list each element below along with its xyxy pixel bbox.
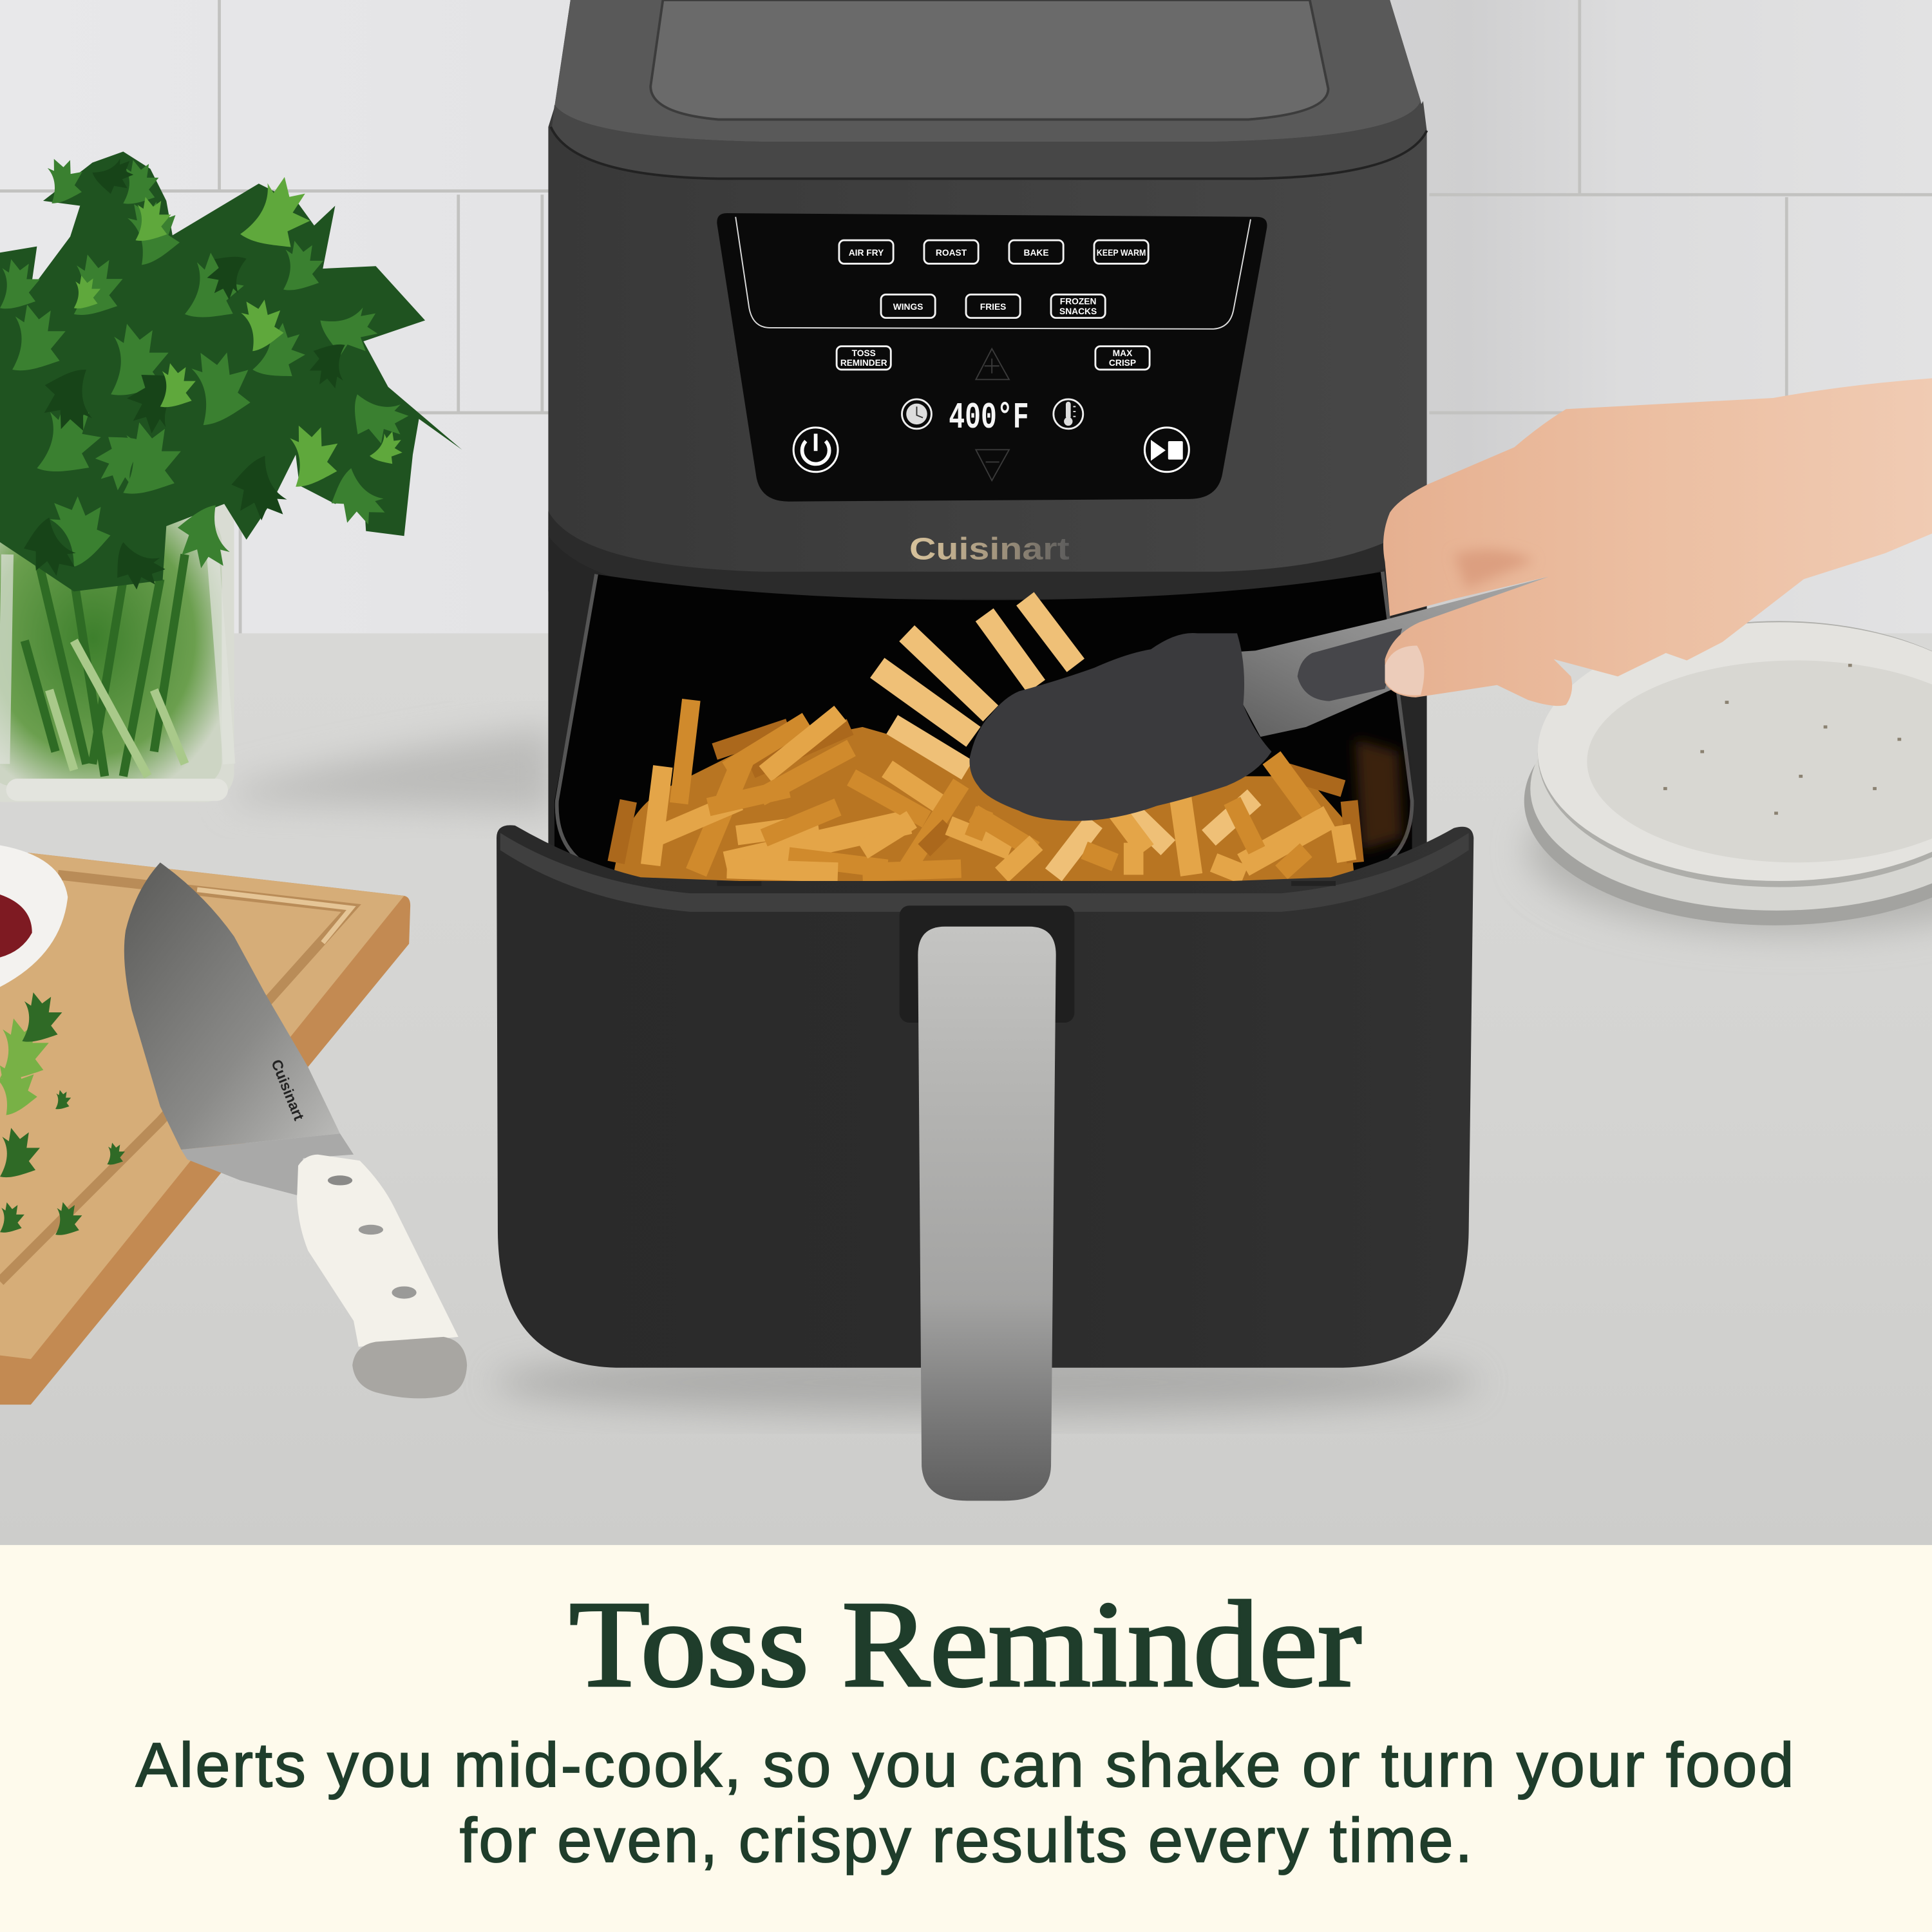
button: wings — [881, 294, 935, 318]
button: fries: FRIES — [980, 302, 1006, 312]
chopped herbs — [0, 992, 125, 1235]
button: bake: BAKE — [1024, 248, 1049, 258]
button: frozen snacks: SNACKS — [1059, 307, 1097, 316]
tongs — [970, 576, 1549, 821]
icon: clock — [902, 399, 931, 429]
bottom caption panel — [0, 1545, 1932, 1932]
wall tiles — [0, 0, 1932, 641]
title: Toss Reminder — [569, 1577, 1361, 1712]
knife logo: Cuisinart — [268, 1057, 308, 1123]
cutting board — [0, 853, 410, 1405]
description line 1: Alerts you mid-cook, so you can shake or turn your food — [135, 1730, 1794, 1800]
button: keep warm — [1094, 240, 1148, 263]
button: toss reminder: TOSS — [852, 348, 876, 358]
chef's knife — [124, 862, 467, 1398]
button: keep warm: KEEP WARM — [1097, 248, 1146, 258]
curled finger shadow — [1454, 549, 1534, 589]
silver drawer handle — [918, 927, 1056, 1501]
lid band — [552, 101, 1427, 178]
lid surround — [554, 0, 1421, 142]
button: frozen snacks — [1051, 294, 1105, 318]
fryer collar and basket opening — [548, 511, 1427, 887]
button: roast — [924, 240, 978, 263]
lid panel — [650, 0, 1328, 120]
sauce bowl — [0, 845, 68, 987]
button: toss reminder — [837, 346, 891, 370]
button: max crisp: MAX — [1113, 348, 1133, 358]
brand logo: Cuisinart — [909, 533, 1070, 567]
temperature up arrow — [976, 348, 1009, 379]
button: bake — [1009, 240, 1063, 263]
temperature down arrow — [976, 450, 1009, 480]
drawer front — [497, 825, 1473, 1368]
fingernail — [1385, 646, 1425, 696]
icon: power — [793, 428, 838, 472]
tong grip — [1298, 629, 1402, 701]
icon: thermometer — [1054, 399, 1083, 429]
tong arm — [1237, 576, 1549, 737]
hand — [1383, 378, 1932, 706]
tong head — [970, 633, 1271, 821]
button: air fry: AIR FRY — [849, 248, 884, 258]
handle socket — [900, 905, 1074, 1023]
parsley bunch — [0, 151, 462, 596]
button: roast: ROAST — [936, 248, 967, 258]
countertop — [0, 633, 1932, 1545]
temperature readout: 400°F — [949, 397, 1029, 439]
button: max crisp: CRISP — [1109, 358, 1136, 368]
control panel — [717, 213, 1267, 502]
button: fries — [966, 294, 1020, 318]
button: max crisp — [1095, 346, 1150, 370]
air fryer upper body — [548, 0, 1427, 591]
french fries — [614, 599, 1356, 887]
button: toss reminder: REMINDER — [840, 358, 887, 368]
button: frozen snacks: FROZEN — [1060, 297, 1096, 307]
icon: start stop — [1144, 428, 1189, 472]
plates — [1524, 621, 1932, 934]
button: air fry — [839, 240, 893, 263]
description line 2: for even, crispy results every time. — [460, 1805, 1472, 1875]
button: wings: WINGS — [893, 302, 923, 312]
glass jar with stems — [0, 495, 234, 802]
